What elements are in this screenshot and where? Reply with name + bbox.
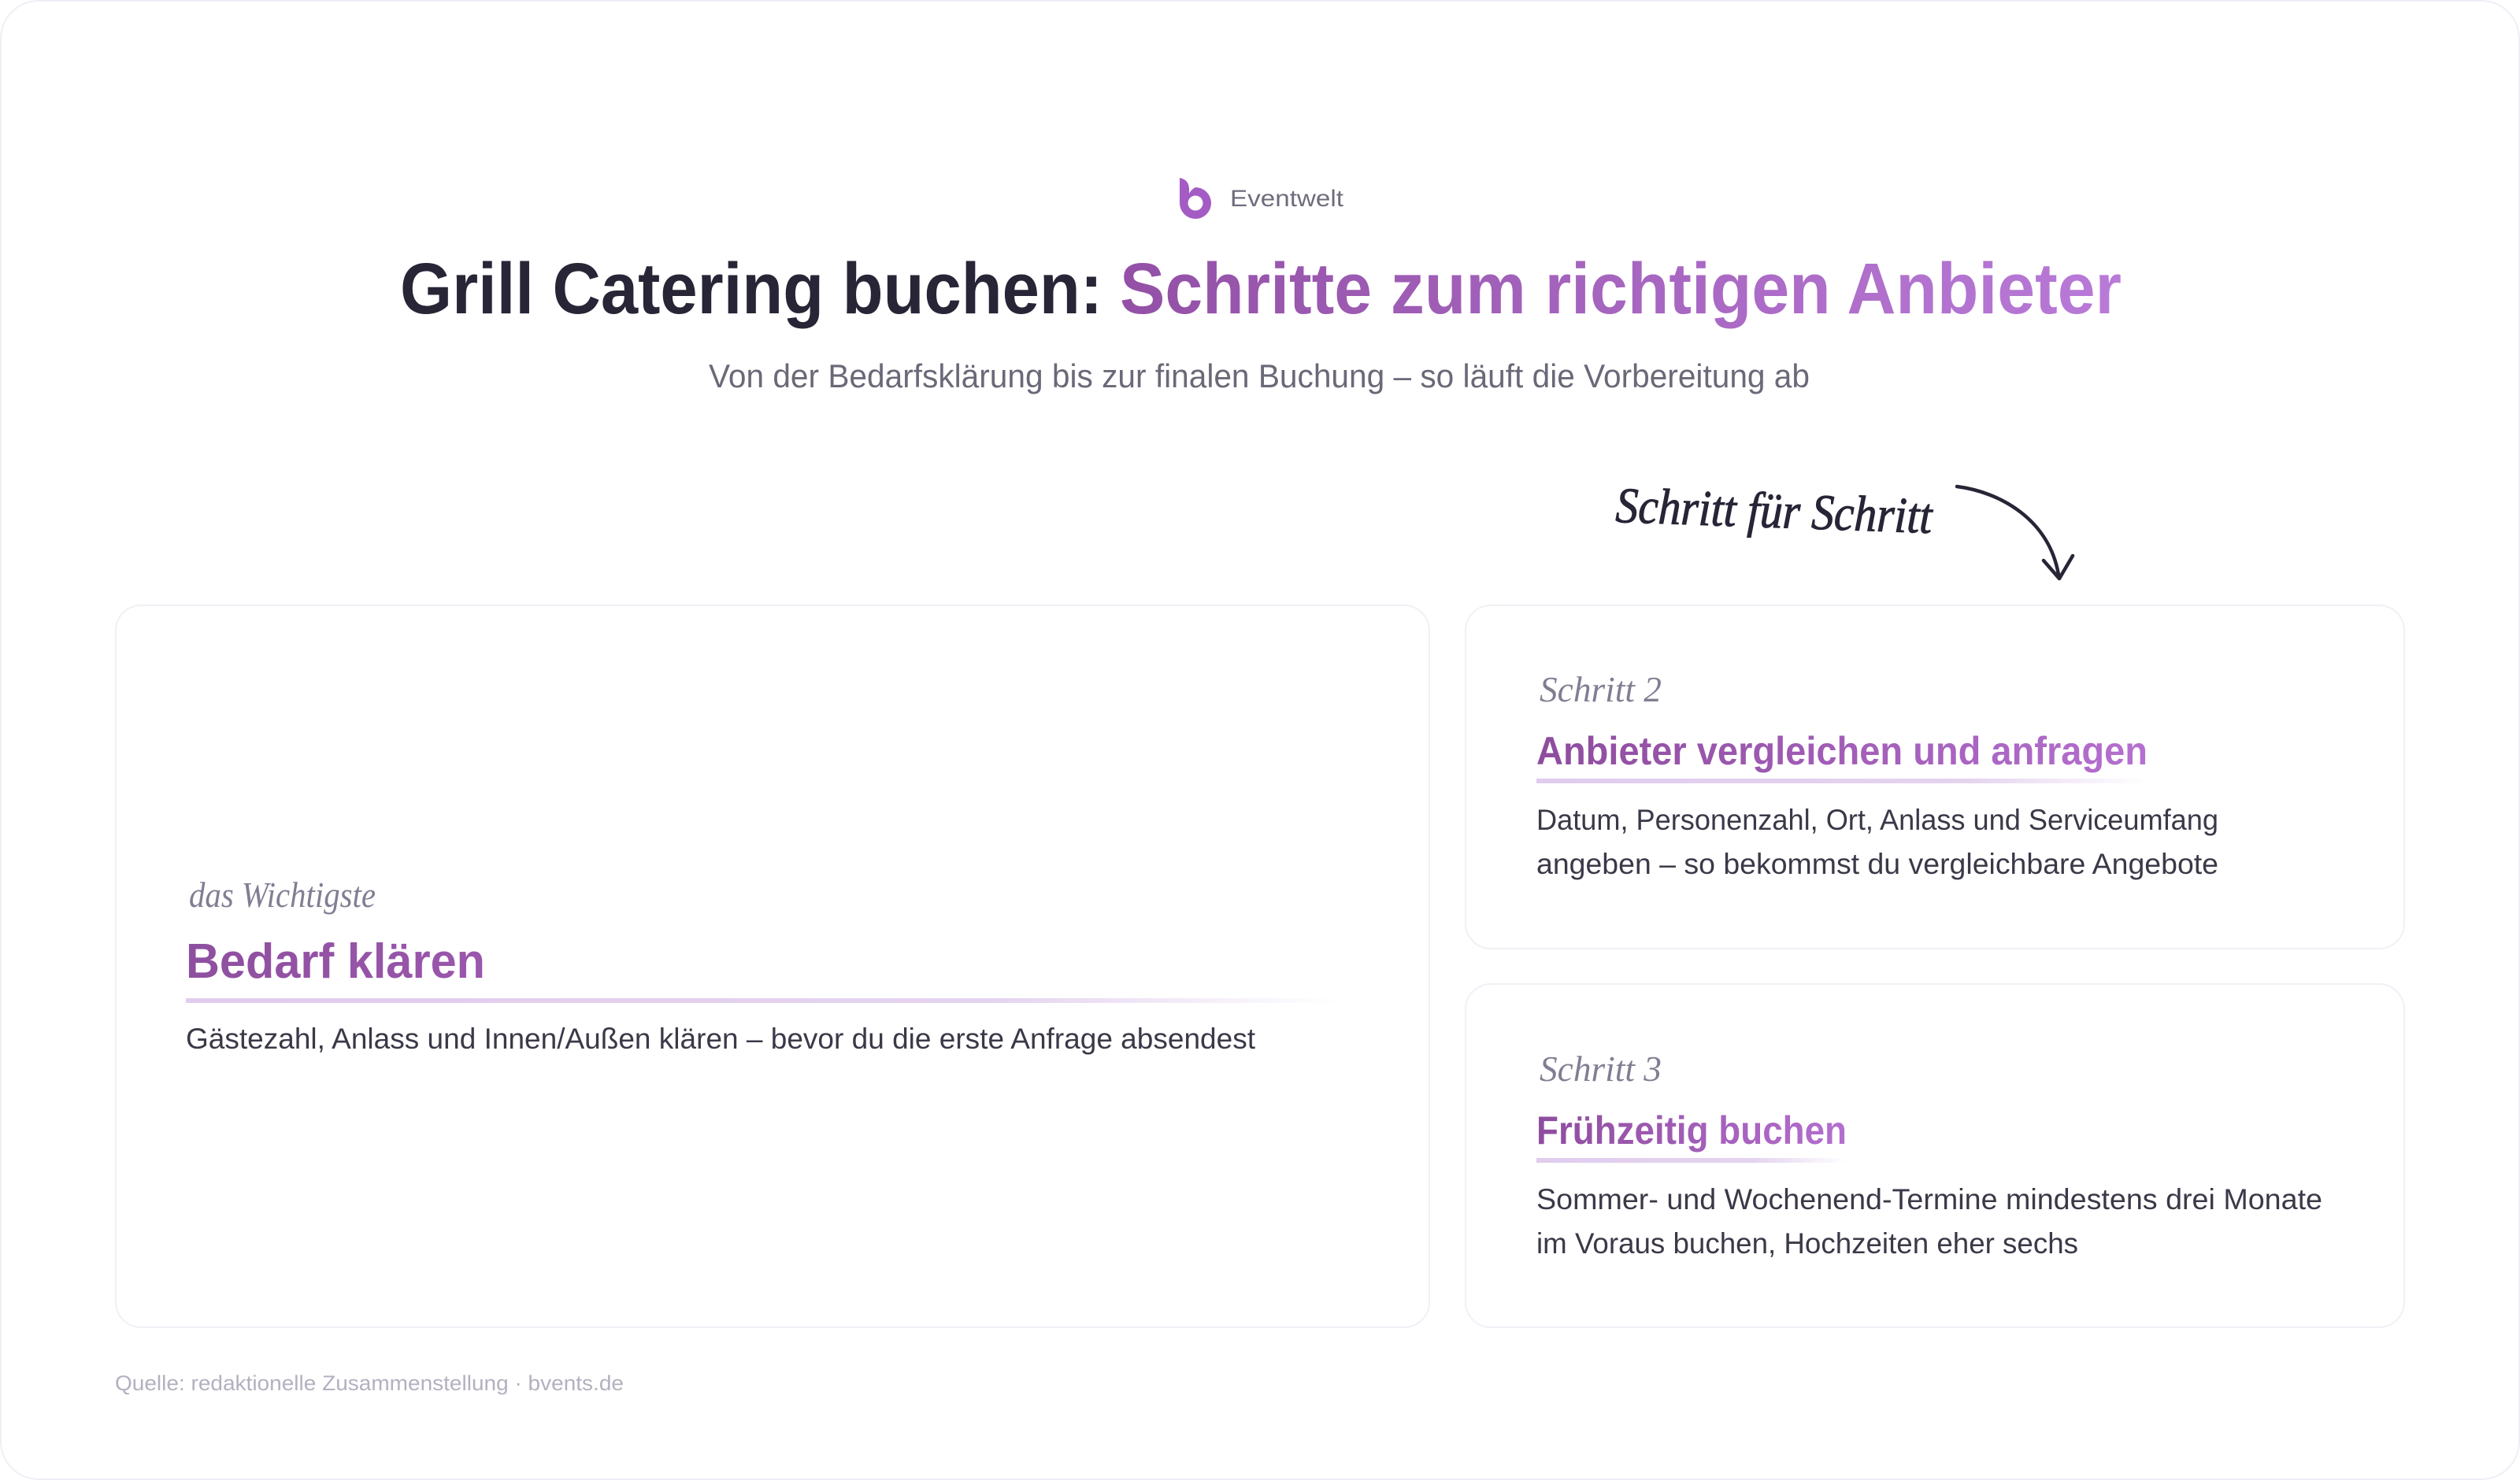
arrow <box>1957 487 2073 579</box>
brand name: Eventwelt <box>1230 186 1344 212</box>
heading: Bedarf klären: Bedarf klären <box>186 934 485 989</box>
underline <box>1536 779 2148 783</box>
brand header <box>1180 178 1344 219</box>
heading: Frühzeitig buchen: Frühzeitig buchen <box>1536 1108 1847 1153</box>
label: Schritt 3: Schritt 3 <box>1540 1049 1662 1089</box>
panel: Bedarf klären <box>116 605 1429 1327</box>
description <box>1536 1183 2322 1260</box>
source note: Quelle: redaktionelle Zusammenstellung · bvents.de <box>115 1371 624 1395</box>
handwritten note: Schritt für Schritt: Schritt für Schritt <box>1615 477 1935 544</box>
panel: Schritt 2 <box>1466 605 2404 949</box>
description: angeben – so bekommst du vergleichbare Angebote <box>1536 848 2218 880</box>
description: Datum, Personenzahl, Ort, Anlass und Serviceumfang <box>1536 804 2218 836</box>
title: Grill Catering buchen: <box>400 249 1102 329</box>
icon: Eventwelt logo <box>1180 178 1211 219</box>
panel: Schritt 3 <box>1466 984 2404 1327</box>
description: Sommer- und Wochenend-Termine mindestens drei Monate <box>1536 1183 2322 1215</box>
label: das Wichtigste: das Wichtigste <box>189 875 376 915</box>
subtitle: Von der Bedarfsklärung bis zur finalen Buchung – so läuft die Vorbereitung ab <box>709 357 1810 394</box>
underline <box>1536 1158 1847 1163</box>
label: Schritt 2: Schritt 2 <box>1540 669 1662 709</box>
description: Gästezahl, Anlass und Innen/Außen klären – bevor du die erste Anfrage absendest <box>186 1023 1256 1055</box>
underline <box>186 998 1339 1003</box>
heading: Anbieter vergleichen und anfragen: Anbieter vergleichen und anfragen <box>1536 729 2148 773</box>
title: Schritte zum richtigen Anbieter <box>1120 249 2122 329</box>
description: im Voraus buchen, Hochzeiten eher sechs <box>1536 1227 2078 1260</box>
description <box>1536 804 2218 880</box>
